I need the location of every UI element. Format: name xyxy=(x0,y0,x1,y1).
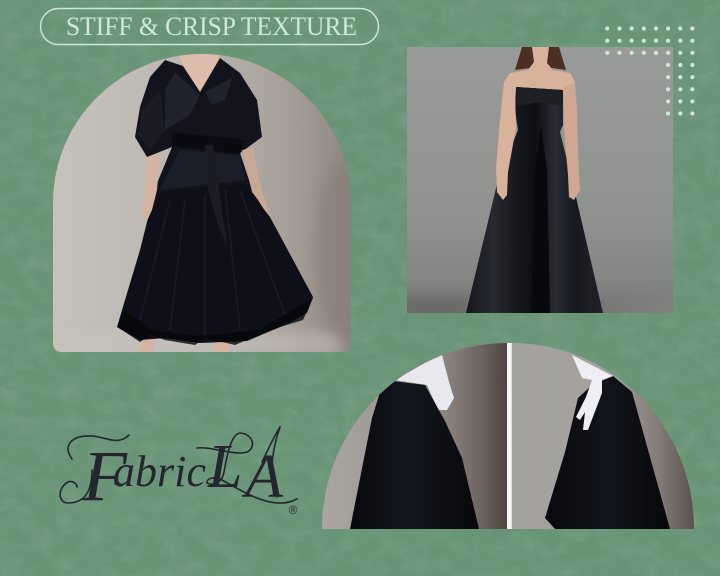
logo flourishes xyxy=(60,427,297,503)
model neck and chest xyxy=(504,47,575,95)
tulle skirt xyxy=(117,183,313,343)
white blouse and bow xyxy=(572,355,613,430)
logo: FabricLA: A xyxy=(241,443,284,511)
panel: half-circle photo, left side view of skirt xyxy=(322,343,507,529)
panel: square photo of strapless satin gown xyxy=(400,47,680,326)
logo: FabricLA: abric xyxy=(113,447,206,496)
jacket xyxy=(135,58,262,193)
panel: half-circle photo, right side view of skirt xyxy=(512,343,694,529)
logo: FabricLA xyxy=(60,427,298,517)
black skirt xyxy=(545,376,670,529)
divider: white bar between the half-circle photos xyxy=(507,343,512,529)
logo: FabricLA: L xyxy=(207,433,242,501)
belt and sash xyxy=(172,132,245,154)
decoration: dot grid xyxy=(605,26,695,116)
model neck and legs xyxy=(138,52,232,352)
gown xyxy=(466,87,603,313)
black skirt xyxy=(350,381,479,529)
model arms and hands xyxy=(496,82,580,200)
panel: arched photo of black taffeta jacket and tulle skirt xyxy=(53,52,375,356)
logo: FabricLA: F xyxy=(82,436,128,516)
registered mark: ® xyxy=(289,503,298,517)
model arms and hands xyxy=(142,148,270,221)
hair xyxy=(515,47,566,70)
white blouse cuff xyxy=(395,355,454,410)
title pill xyxy=(40,8,378,44)
title text: STIFF & CRISP TEXTURE xyxy=(66,12,357,41)
